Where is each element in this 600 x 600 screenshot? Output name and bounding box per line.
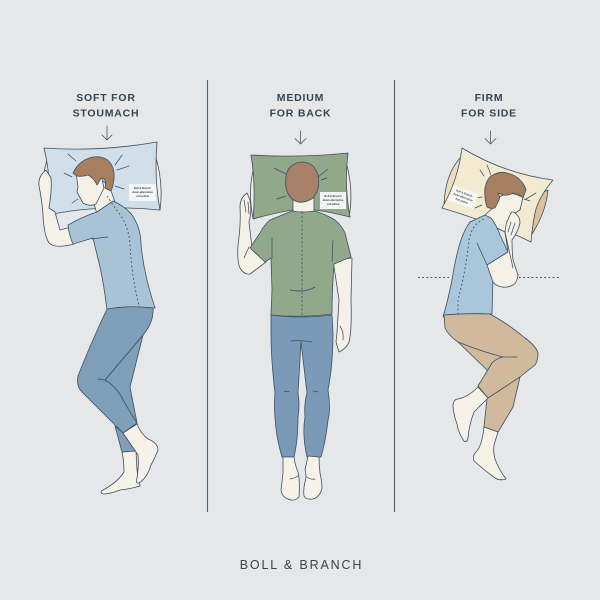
- feet: back view: [281, 456, 322, 500]
- pillow tag: down-alternative: [453, 192, 474, 203]
- heading: firm for side: FOR SIDE: [461, 108, 517, 120]
- shirt: blue: [68, 196, 155, 310]
- pillow tag: soft pillow: [136, 194, 150, 198]
- feet: side sleeper: [453, 387, 506, 480]
- arrow: firm: [485, 131, 496, 144]
- pillow tag: firm pillow: [455, 197, 469, 205]
- pillow tag: soft pillow: [327, 202, 340, 206]
- panel: medium pillow for back sleepers: [238, 92, 352, 500]
- shirt: green: [250, 211, 351, 317]
- pillow tag: down-alternative: [132, 190, 153, 194]
- forearm and hand: [487, 212, 520, 287]
- head: side sleeper: [485, 172, 526, 208]
- left arm and hand: [238, 193, 266, 274]
- pillow: firm cream: [442, 148, 553, 242]
- pillow: medium green: [250, 153, 351, 219]
- head: back view: [286, 162, 319, 202]
- heading: soft for stomach: SOFT FOR: [76, 92, 136, 104]
- neck: back view: [293, 195, 314, 212]
- neck and face: side sleeper: [485, 192, 523, 232]
- pillow tag: Boll & Branch: [324, 194, 342, 198]
- panel: soft pillow for stomach sleepers: [39, 92, 161, 494]
- pillow tag: Boll & Branch: [456, 188, 473, 198]
- heading: medium for back: FOR BACK: [270, 108, 331, 120]
- pillow tag: down-alternative: [323, 198, 344, 202]
- dashed reference line: [418, 276, 559, 278]
- legs: blue pants: [271, 315, 333, 457]
- head: stomach sleeper: [64, 154, 129, 205]
- pillow tag: Boll & Branch: [134, 186, 151, 190]
- brand name: BOLL & BRANCH: [240, 558, 363, 572]
- arrow: medium: [295, 131, 306, 144]
- arm and hand: stomach sleeper: [39, 170, 78, 246]
- feet: stomach sleeper: [101, 424, 158, 494]
- legs: blue pants: [78, 307, 153, 452]
- neck: stomach sleeper: [93, 178, 115, 214]
- panel: firm pillow for side sleepers: [418, 92, 559, 480]
- pillow tag: [448, 185, 479, 209]
- pillow tag: [129, 184, 156, 201]
- heading: firm for side: FIRM: [475, 92, 503, 104]
- heading: medium for back: MEDIUM: [277, 92, 324, 104]
- shirt: blue: [443, 215, 508, 317]
- arrow: soft: [102, 126, 112, 140]
- right arm and hand: [333, 258, 352, 352]
- legs: tan pants: [444, 314, 538, 432]
- heading: soft for stomach: STOUMACH: [73, 108, 139, 120]
- pillow: soft blue: [43, 142, 161, 215]
- pillow tag: [320, 192, 346, 209]
